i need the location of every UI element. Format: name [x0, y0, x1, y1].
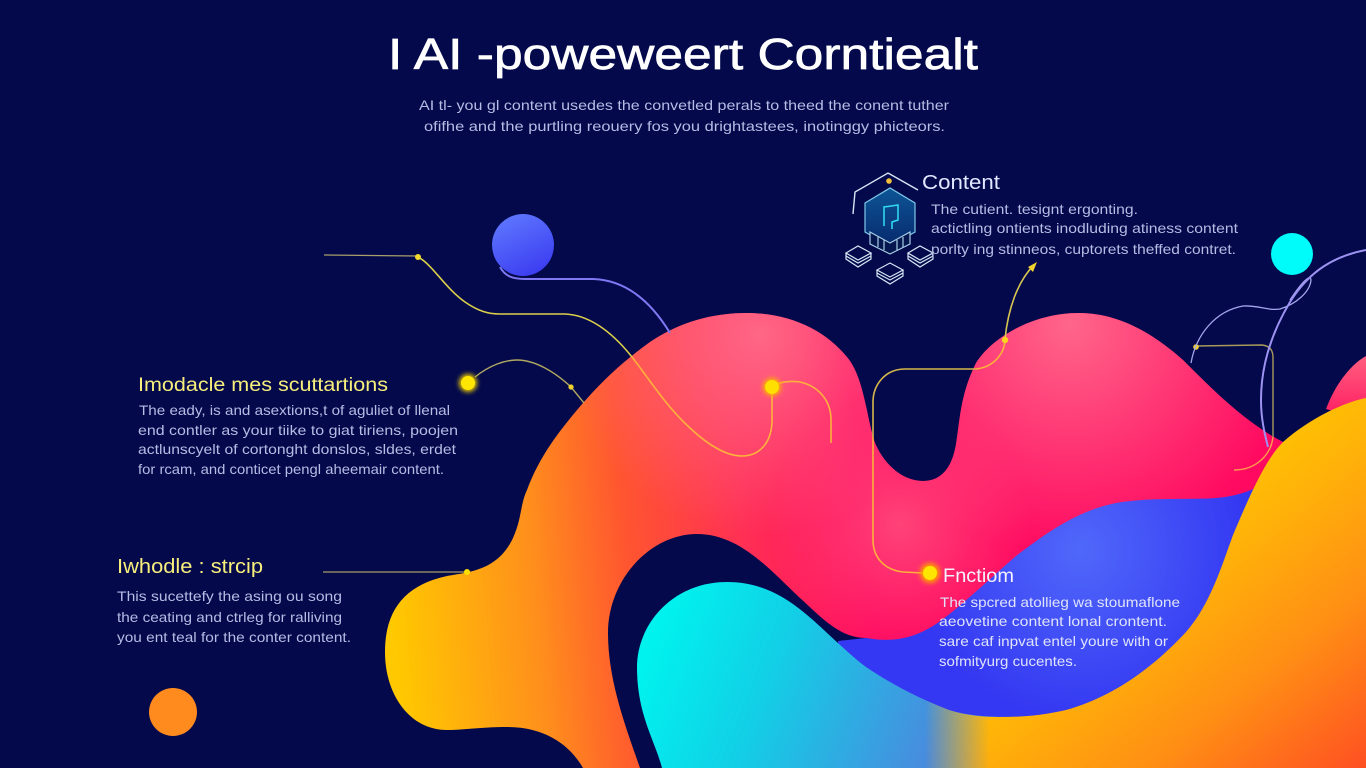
- text: left upper body: actlunscyelt of cortonght donslos, sldes, erdet: [138, 441, 456, 457]
- text: content body: [931, 201, 1238, 257]
- intro text: AI tl- you gl content usedes the convetled perals to theed the conent tuther: [419, 97, 949, 113]
- connector: big purple arc: [1261, 250, 1366, 447]
- text: function body: [939, 594, 1180, 669]
- dot: gold box node: [1193, 344, 1199, 350]
- title: I AI -poweweert Corntiealt: [388, 30, 978, 79]
- heading: left lower: Iwhodle : strcip: [117, 556, 263, 578]
- connector: gold box line: [1196, 345, 1273, 470]
- text: left upper body: for rcam, and conticet pengl aheemair content.: [138, 461, 444, 477]
- text: left lower body: the ceating and ctrleg for ralliving: [117, 609, 342, 625]
- dot: yellow line start: [415, 254, 421, 260]
- heading: Function: Fnctiom: [943, 566, 1014, 587]
- text: function body: The spcred atollieg wa stoumaflone: [940, 594, 1180, 610]
- panel: left upper text: [138, 375, 458, 477]
- text: function body: aeovetine content lonal crontent.: [939, 613, 1167, 629]
- dot: function node: [920, 563, 940, 583]
- intro text: [419, 97, 949, 134]
- decorative small pink blob: [1326, 356, 1366, 420]
- text: left upper body: The eady, is and asextions,t of aguliet of llenal: [139, 402, 450, 418]
- connector: line to orange lobe: [323, 571, 467, 573]
- text: function body: sofmityurg cucentes.: [939, 653, 1077, 669]
- orange blob: [925, 398, 1366, 768]
- panel: left lower text: [117, 556, 351, 645]
- text: content body: The cutient. tesignt ergonting.: [931, 201, 1138, 217]
- heading: Content: Content: [922, 172, 1000, 194]
- heading: left upper: Imodacle mes scuttartions: [138, 375, 388, 396]
- panel: function: [920, 563, 1180, 669]
- dot: orange lobe node: [464, 569, 470, 575]
- text: left lower body: you ent teal for the conter content.: [117, 629, 351, 645]
- circle: orange: [149, 688, 197, 736]
- dot: node on right lobe: [1002, 337, 1008, 343]
- dot: arc start: [459, 374, 477, 392]
- main gradient blob: [380, 300, 1310, 768]
- arrow head: [1028, 262, 1037, 272]
- text: left upper body: end contler as your tiike to giat tiriens, poojen: [138, 422, 458, 438]
- dot: arc end: [568, 384, 574, 390]
- connector: yellow line across main blob: [324, 255, 831, 456]
- connector: line from Function to Content: [873, 265, 1034, 573]
- circle: cyan: [1271, 233, 1313, 275]
- icon: isometric content cube: [846, 173, 933, 284]
- text: left upper body: [138, 402, 458, 477]
- connector: arc above left text: [475, 360, 584, 403]
- intro text: ofifhe and the purtling reouery fos you drightastees, inotinggy phicteors.: [424, 118, 945, 134]
- text: left lower body: [117, 588, 351, 645]
- panel: content: [846, 172, 1238, 284]
- circle: blue: [492, 214, 554, 276]
- dot: main blob node glow: [763, 378, 781, 396]
- connector: thin lavender loop: [1191, 278, 1311, 363]
- cyan blob: [637, 582, 1010, 768]
- connector: purple line from blue circle: [500, 267, 670, 333]
- blue blob: [838, 489, 1270, 730]
- text: content body: porlty ing stinneos, cuptorets theffed contret.: [931, 241, 1236, 257]
- text: content body: actictling ontients inodluding atiness content: [931, 220, 1238, 236]
- text: left lower body: This sucettefy the asing ou song: [117, 588, 342, 604]
- text: function body: sare caf inpvat entel youre with or: [939, 633, 1168, 649]
